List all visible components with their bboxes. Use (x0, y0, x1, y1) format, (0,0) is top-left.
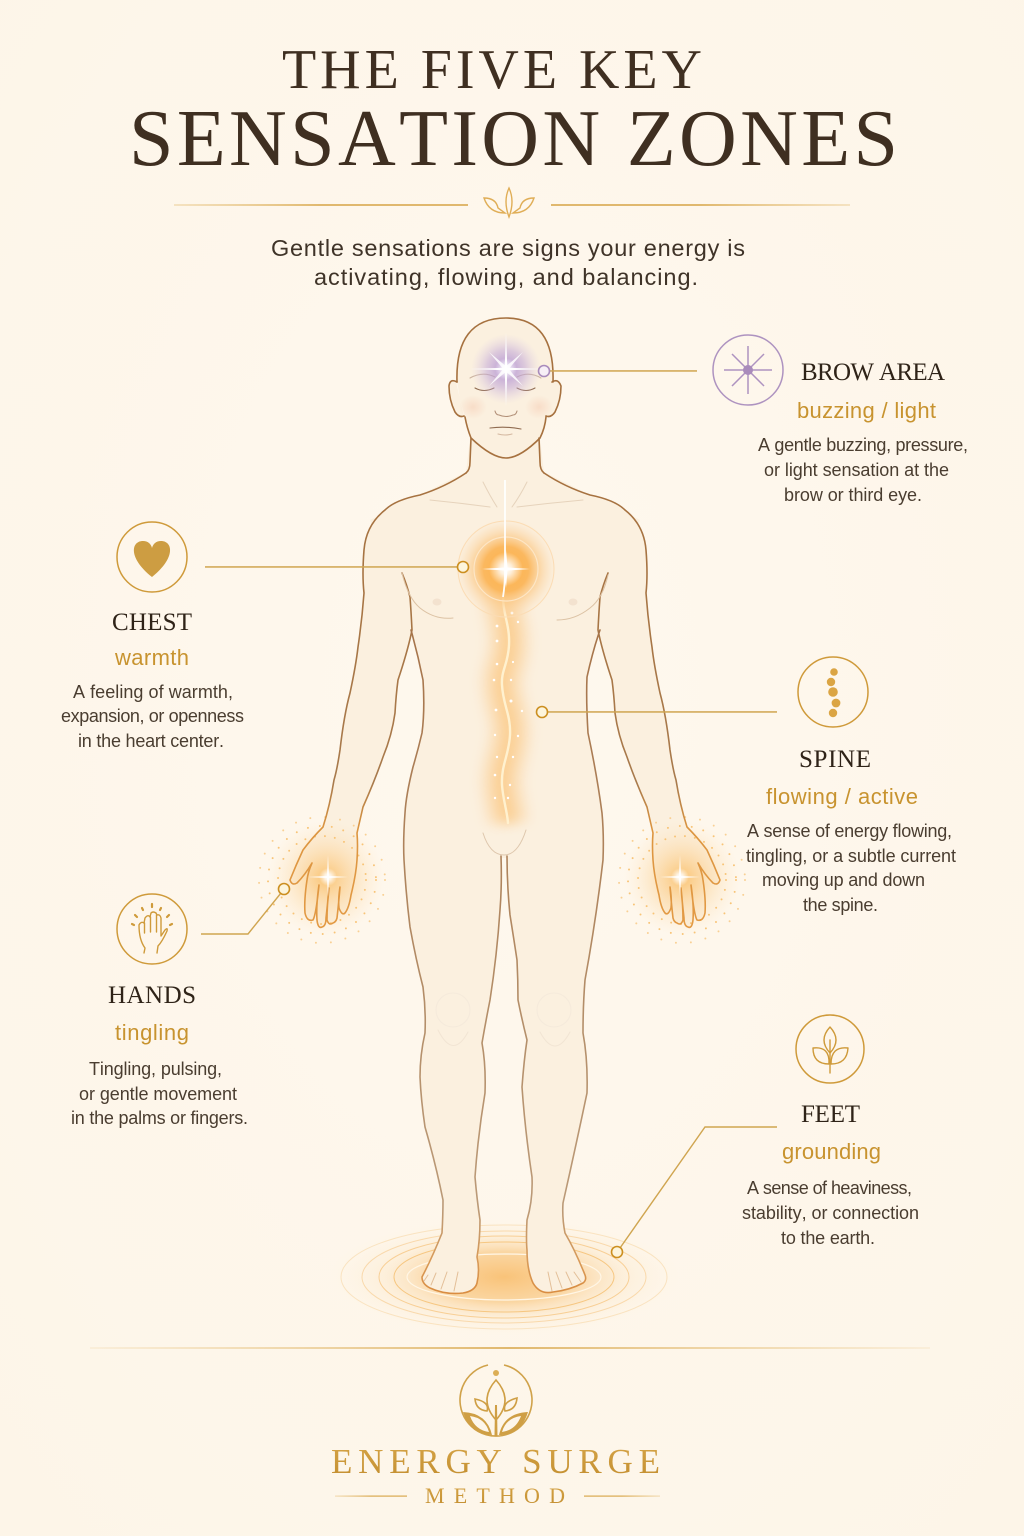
panel: hands (71, 894, 248, 1128)
description: chest: A feeling of warmth, (73, 682, 233, 702)
panel: feet (742, 1015, 919, 1248)
connector: brow (538, 366, 697, 376)
heading: feet: FEET (801, 1101, 860, 1128)
description: spine: moving up and down (762, 870, 925, 890)
logo wordmark: METHOD (425, 1483, 565, 1508)
logo emblem (460, 1365, 532, 1436)
description: feet (742, 1178, 919, 1248)
description: feet: to the earth. (781, 1228, 875, 1248)
description: brow: A gentle buzzing, pressure, (758, 435, 968, 455)
face features (470, 374, 541, 435)
icon: sprout (796, 1015, 864, 1083)
title: SENSATION ZONES (129, 95, 898, 183)
panel: chest (61, 522, 244, 751)
icon: brow star (713, 335, 783, 405)
description: brow (758, 435, 968, 505)
icon: heart (117, 522, 187, 592)
description: hands: in the palms or fingers. (71, 1108, 248, 1128)
anatomy lines (402, 482, 608, 1291)
header divider with leaf ornament (174, 188, 850, 217)
description: spine (746, 821, 956, 915)
panel: brow area (713, 335, 968, 505)
description: hands: or gentle movement (79, 1084, 237, 1104)
description: feet: stability, or connection (742, 1203, 919, 1223)
description: chest: in the heart center. (78, 731, 224, 751)
connector: chest (205, 562, 468, 572)
hand glows (259, 817, 745, 943)
heading: chest: CHEST (112, 609, 192, 636)
connector: spine (536, 706, 777, 718)
brow glow (469, 332, 543, 407)
description: spine: tingling, or a subtle current (746, 846, 956, 866)
subtitle: activating, flowing, and balancing. (314, 264, 698, 290)
hand sparkles (308, 855, 700, 897)
description: brow: or light sensation at the (764, 460, 949, 480)
sensation: tingling: tingling (115, 1020, 189, 1045)
heading: spine: SPINE (799, 746, 871, 773)
cheek blush (459, 395, 553, 419)
description: brow: brow or third eye. (784, 485, 922, 505)
sensation: buzzing / light: buzzing / light (797, 398, 936, 423)
panel: spine (746, 657, 956, 915)
description: chest: expansion, or openness (61, 706, 244, 726)
description: hands: Tingling, pulsing, (89, 1059, 222, 1079)
connector: feet (612, 1127, 777, 1258)
body outline strokes (290, 318, 720, 1293)
logo side lines (335, 1496, 660, 1497)
chest glow (456, 480, 556, 619)
title (129, 39, 898, 183)
connector: hands (201, 884, 290, 934)
ground glow ripples under feet (329, 1219, 679, 1335)
subtitle (271, 235, 745, 290)
sensation: flowing / active: flowing / active (766, 784, 918, 809)
logo wordmark (331, 1442, 660, 1508)
icon: vertebrae (798, 657, 868, 727)
description: hands (71, 1059, 248, 1128)
description: chest (61, 682, 244, 751)
description: feet: A sense of heaviness, (747, 1178, 912, 1198)
icon: hand (117, 894, 187, 964)
sensation: grounding: grounding (782, 1139, 881, 1164)
description: spine: A sense of energy flowing, (747, 821, 952, 841)
body fill silhouette (290, 318, 720, 1293)
subtitle: Gentle sensations are signs your energy is (271, 235, 745, 261)
description: spine: the spine. (803, 895, 878, 915)
footer divider (90, 1347, 930, 1349)
spine energy channel (493, 597, 523, 823)
logo wordmark: ENERGY SURGE (331, 1442, 660, 1481)
heading: hands: HANDS (108, 982, 196, 1009)
heading: brow area: BROW AREA (801, 359, 945, 386)
body figure (259, 318, 745, 1293)
title: THE FIVE KEY (282, 39, 702, 101)
sensation: warmth: warmth (114, 645, 189, 670)
